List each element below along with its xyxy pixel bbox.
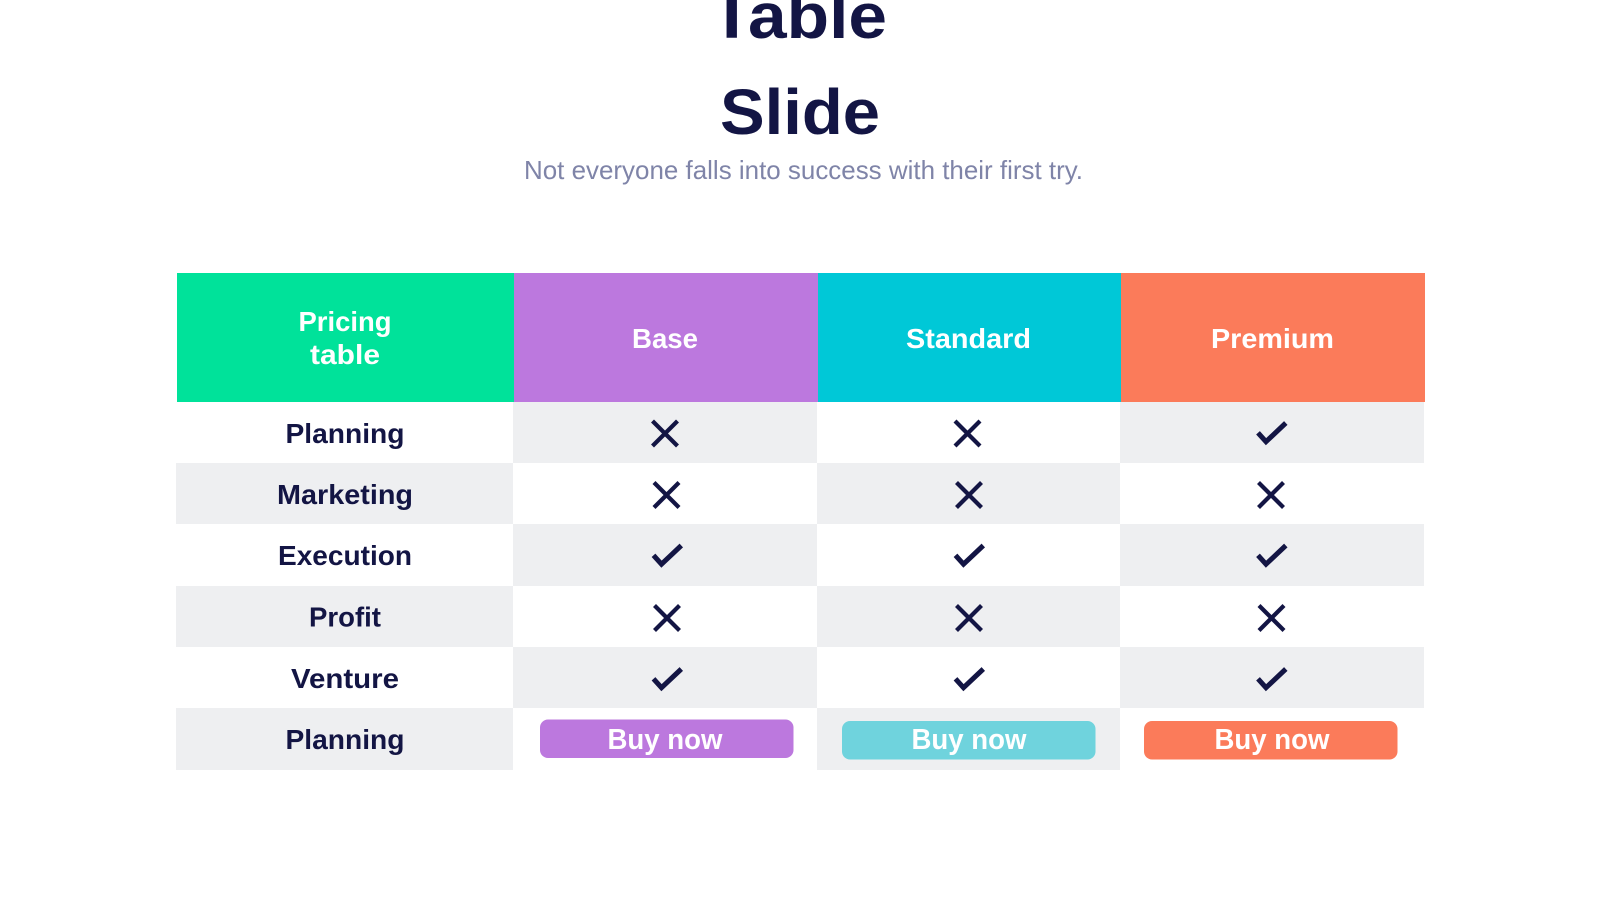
title xyxy=(710,0,887,148)
header: standard: Standard xyxy=(906,323,1031,354)
row: profit xyxy=(176,586,1284,647)
row: execution: Execution xyxy=(278,540,412,571)
row: planning with buttons xyxy=(176,708,1398,770)
button: base: Buy now xyxy=(608,724,723,756)
row: planning xyxy=(286,402,1424,463)
title: Slide xyxy=(720,76,880,148)
row: planning: Planning xyxy=(286,418,404,449)
row: venture: Venture xyxy=(291,663,399,694)
header: base: Base xyxy=(632,323,698,354)
header: pricing table: Pricing xyxy=(298,306,392,337)
button: base xyxy=(540,720,794,758)
button: standard: Buy now xyxy=(912,724,1027,756)
row: marketing: Marketing xyxy=(277,479,413,510)
pricing table xyxy=(176,273,1425,770)
row: marketing xyxy=(176,463,1284,524)
subtitle: Not everyone falls into success with their first try. xyxy=(524,155,1083,185)
row: planning with buttons: Planning xyxy=(286,724,404,755)
header: premium: Premium xyxy=(1211,323,1334,354)
header: premium xyxy=(1121,273,1425,402)
row: profit: Profit xyxy=(309,602,381,632)
header: base xyxy=(514,273,818,402)
row: venture xyxy=(291,647,1424,708)
row: execution xyxy=(278,524,1424,586)
button: premium xyxy=(1144,721,1398,760)
header: pricing table xyxy=(177,273,514,402)
header: pricing table: table xyxy=(310,339,380,370)
button: premium: Buy now xyxy=(1214,724,1330,756)
header: standard xyxy=(818,273,1121,402)
button: standard xyxy=(842,721,1096,760)
